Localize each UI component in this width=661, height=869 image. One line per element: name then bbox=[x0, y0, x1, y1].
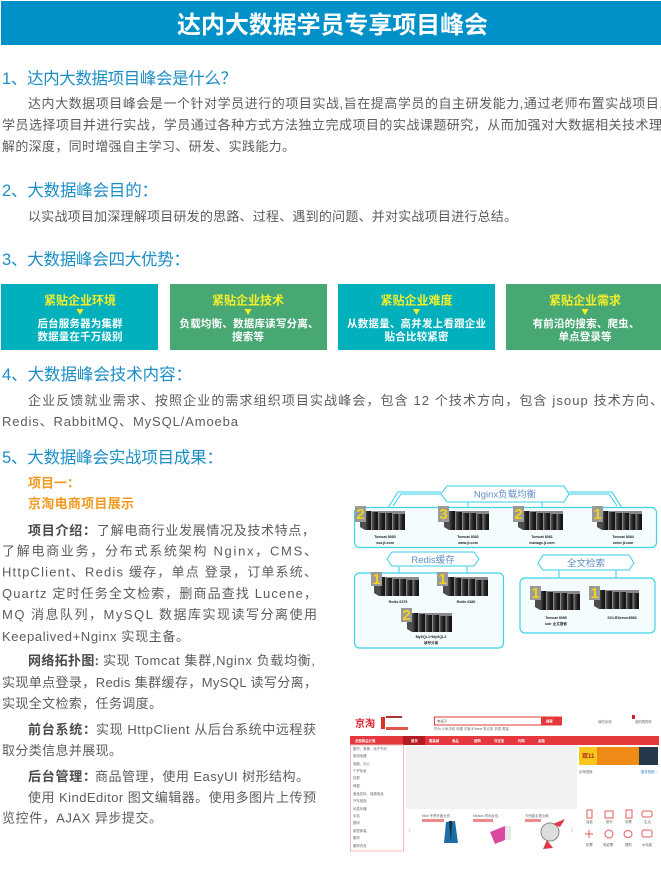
Nginx cluster box: 2 bbox=[514, 506, 523, 523]
card: enterprise demand: 有前沿的搜索、爬虫、 bbox=[532, 317, 640, 330]
product items: › bbox=[570, 825, 573, 836]
Nginx cluster box: Tomcat 8083 bbox=[374, 535, 396, 539]
service icon captions bbox=[586, 819, 653, 847]
category sidebar: 手机 bbox=[353, 813, 360, 818]
Nginx cluster box: 3 bbox=[439, 506, 448, 523]
section 4 body: 企业反馈就业需求、按照企业的需求组织项目实战峰会，包含 12 个技术方向，包含 jsoup 技术方向、 bbox=[28, 393, 661, 408]
section 4 heading: 4、大数据峰会技术内容： bbox=[2, 365, 192, 384]
full-text search cluster box: 1 bbox=[531, 585, 540, 602]
Redis label: Redis缓存 bbox=[411, 554, 455, 566]
section 1 body bbox=[2, 96, 661, 154]
news heading: 京淘快报 bbox=[579, 769, 593, 774]
site logo: 京淘 bbox=[355, 717, 375, 730]
card: enterprise technology: 紧贴企业技术 bbox=[212, 292, 284, 308]
full-text search label bbox=[538, 555, 634, 570]
product items bbox=[408, 813, 573, 849]
section 1 body: 解的深度，同时增强自主学习、研发、实践能力。 bbox=[2, 139, 295, 154]
search box: 电视子 bbox=[437, 718, 448, 724]
full-text search cluster box: solr 全文搜索 bbox=[545, 621, 567, 626]
product items: 卡西欧手表女款 bbox=[525, 813, 549, 818]
network topology text: 实现 Tomcat 集群,Nginx 负载均衡, bbox=[103, 653, 315, 668]
card: enterprise environment: 后台服务器为集群 bbox=[38, 317, 123, 330]
user links: 我的购物车 bbox=[635, 719, 653, 724]
Redis cluster box: 1 bbox=[438, 571, 447, 588]
Nginx cluster box: order.jt.com bbox=[613, 541, 633, 545]
front-end system text: 取分类信息并展现。 bbox=[2, 743, 122, 758]
service icon captions: 话费 bbox=[586, 819, 593, 824]
project one label: 项目一： bbox=[28, 476, 80, 490]
user links: 我的京淘 bbox=[598, 719, 612, 724]
full-text search label: 全文检索 bbox=[567, 558, 605, 570]
front-end system text: 前台系统： bbox=[28, 722, 96, 737]
Redis cluster box: 读写分离 bbox=[424, 640, 439, 645]
search box bbox=[434, 717, 562, 731]
category sidebar: 图书、音像、电子书刊 bbox=[353, 746, 388, 751]
Nginx cluster box: 1 bbox=[593, 506, 602, 523]
e-commerce website screenshot bbox=[350, 715, 659, 851]
full-text search cluster box bbox=[520, 578, 655, 633]
full-text search cluster box: SOLRServer8983 bbox=[607, 616, 637, 620]
product items: Nike 冬季外套大衣 bbox=[422, 813, 451, 818]
front-end system text: 实现 HttpClient 从后台系统中远程获 bbox=[96, 722, 316, 737]
Redis cluster box: MySQL1+MySQL2 bbox=[416, 635, 446, 639]
search box: 华为 小米手机 电视 平板 iPhone 笔记本 手表 男装 bbox=[434, 726, 509, 731]
Nginx cluster box: www.jt.com bbox=[457, 541, 478, 545]
service icon captions: 机票 bbox=[586, 842, 593, 847]
navigation bar: 金融 bbox=[538, 738, 545, 743]
section 4 body bbox=[2, 393, 661, 429]
promo banner bbox=[579, 747, 658, 765]
project introduction: 项目介绍： bbox=[28, 523, 96, 538]
Redis cluster box: Redis 6379 bbox=[389, 600, 407, 604]
card: enterprise difficulty: 从数据量、高并发上看跟企业 bbox=[347, 317, 486, 330]
section 3 heading: 3、大数据峰会四大优势： bbox=[2, 250, 190, 269]
project introduction: Keepalived+Nginx 实现主备。 bbox=[2, 629, 189, 644]
category sidebar bbox=[350, 745, 404, 851]
category sidebar: 家居家装 bbox=[353, 828, 367, 833]
network topology text: 实现单点登录，Redis 集群缓存，MySQL 读写分离， bbox=[2, 675, 317, 690]
navigation bar bbox=[350, 736, 659, 745]
project one label bbox=[28, 476, 134, 511]
title: 达内大数据学员专享项目峰会 bbox=[177, 12, 488, 39]
card: enterprise demand bbox=[506, 284, 661, 350]
card: enterprise demand: 单点登录等 bbox=[558, 330, 612, 343]
navigation bar: 服装城 bbox=[429, 738, 440, 743]
category sidebar: 电脑、办公 bbox=[353, 761, 371, 766]
section 4 body: Redis、RabbitMQ、MySQL/Amoeba bbox=[2, 414, 239, 429]
Nginx cluster box: sso.jt.com bbox=[376, 541, 394, 545]
project introduction: Quartz 定时任务全文检索，删商品查找 Lucene， bbox=[2, 586, 317, 601]
category sidebar: 汽车用品 bbox=[353, 798, 367, 803]
network topology text bbox=[2, 653, 317, 711]
front-end system text bbox=[2, 722, 316, 758]
back-end management text: 使用 KindEditor 图文编辑器。使用多图片上传预 bbox=[28, 790, 316, 805]
navigation bar: 团购 bbox=[474, 738, 481, 743]
category sidebar: 服饰 bbox=[353, 835, 360, 840]
category sidebar: 玩具乐器 bbox=[353, 806, 367, 811]
Redis cluster box: Redis 6380 bbox=[457, 600, 475, 604]
project introduction: 了解电商业务，分布式系统架构 Nginx，CMS、 bbox=[2, 544, 317, 558]
promo banner: 双11 bbox=[582, 753, 595, 760]
Nginx cluster box: 2 bbox=[356, 506, 365, 523]
full-text search cluster box: 1 bbox=[590, 585, 599, 602]
Redis cluster box: 1 bbox=[372, 571, 381, 588]
navigation bar: 闪购 bbox=[518, 738, 525, 743]
news heading bbox=[579, 769, 657, 774]
category sidebar: 家用电器 bbox=[353, 753, 367, 758]
Nginx cluster box: Tomcat 8082 bbox=[457, 535, 479, 539]
Nginx label: Nginx负载均衡 bbox=[474, 488, 537, 500]
Nginx label bbox=[441, 486, 569, 502]
Redis label bbox=[387, 552, 479, 566]
category sidebar: 服饰内衣 bbox=[353, 843, 367, 848]
back-end management text bbox=[2, 769, 316, 826]
full-text search cluster box: Tomcat 8085 bbox=[545, 616, 567, 620]
category sidebar: 数码 bbox=[353, 820, 360, 825]
section 2 heading: 2、大数据峰会目的： bbox=[2, 181, 158, 200]
service icons bbox=[585, 810, 652, 838]
navigation bar: 食品 bbox=[452, 738, 459, 743]
news heading: 更多快报 › bbox=[641, 769, 657, 774]
card: enterprise environment bbox=[1, 284, 158, 350]
navigation bar: 夺宝岛 bbox=[494, 738, 505, 743]
project introduction: 了解电商行业发展情况及技术特点， bbox=[97, 523, 315, 538]
network topology text: 网络拓扑图: bbox=[28, 653, 99, 668]
card: enterprise technology: 搜索等 bbox=[232, 330, 264, 343]
card: enterprise difficulty: 贴合比较紧密 bbox=[384, 330, 449, 343]
project introduction: HttpClient、Redis 缓存，单点 登录，订单系统、 bbox=[2, 564, 317, 580]
back-end management text: 商品管理，使用 EasyUI 树形结构。 bbox=[95, 769, 309, 784]
card: enterprise demand: 紧贴企业需求 bbox=[549, 292, 621, 308]
product items: ‹ bbox=[408, 825, 411, 836]
Nginx cluster box: manage.jt.com bbox=[529, 541, 555, 545]
section 1 body: 学员选择项目并进行实战，学员通过各种方式方法独立完成项目的实战课题研究，从而加强对大数据相关技术理 bbox=[2, 118, 661, 132]
service icon captions: 水电费 bbox=[642, 842, 653, 847]
service icon captions: 电影票 bbox=[603, 842, 614, 847]
card: enterprise environment: 数据量在千万级别 bbox=[38, 330, 122, 343]
Nginx cluster box: Tomcat 8084 bbox=[612, 535, 634, 539]
service icon captions: 理财 bbox=[625, 842, 632, 847]
connector lines bbox=[388, 492, 622, 612]
card: enterprise technology: 负载均衡、数据库读写分离、 bbox=[180, 317, 318, 330]
service icon captions: 旅行 bbox=[606, 819, 613, 824]
project introduction bbox=[2, 523, 317, 644]
Redis cluster box: 2 bbox=[402, 607, 411, 624]
product items: Midsun 时尚女包 bbox=[473, 813, 499, 818]
service icon captions: 生活 bbox=[644, 819, 651, 824]
section 2 body: 以实战项目加深理解项目研发的思路、过程、遇到的问题、并对实战项目进行总结。 bbox=[28, 209, 517, 224]
site logo bbox=[355, 716, 408, 730]
category sidebar: 个护化妆 bbox=[353, 768, 367, 773]
project one label: 京淘电商项目展示 bbox=[28, 496, 134, 511]
category sidebar: 母婴 bbox=[353, 783, 360, 788]
section 1 heading: 1、达内大数据项目峰会是什么？ bbox=[2, 69, 237, 88]
network topology diagram bbox=[354, 486, 656, 648]
service icon captions: 彩票 bbox=[625, 819, 632, 824]
section 5 heading: 5、大数据峰会实战项目成果： bbox=[2, 448, 223, 467]
card: enterprise difficulty: 紧贴企业难度 bbox=[380, 292, 452, 308]
category sidebar: 食品饮料、保健食品 bbox=[353, 791, 384, 796]
advantage cards bbox=[1, 284, 661, 350]
user links bbox=[598, 715, 653, 724]
card: enterprise technology bbox=[170, 284, 327, 350]
header banner bbox=[1, 1, 661, 45]
carousel placeholder bbox=[406, 746, 577, 809]
back-end management text: 后台管理： bbox=[28, 769, 96, 784]
card: enterprise environment: 紧贴企业环境 bbox=[44, 292, 116, 308]
section 1 body: 达内大数据项目峰会是一个针对学员进行的项目实战,旨在提高学员的自主研发能力,通过老师布置实战项目, bbox=[28, 96, 661, 111]
category sidebar: 钟表 bbox=[353, 775, 360, 780]
navigation bar: 全部商品分类 bbox=[355, 738, 376, 743]
back-end management text: 览控件，AJAX 异步提交。 bbox=[2, 810, 162, 826]
Nginx cluster box: Tomcat 8081 bbox=[531, 535, 553, 539]
card: enterprise difficulty bbox=[338, 284, 495, 350]
Redis cluster box bbox=[354, 571, 504, 648]
Nginx cluster box bbox=[354, 506, 656, 548]
navigation bar: 首页 bbox=[411, 738, 418, 743]
network topology text: 实现全文检索，任务调度。 bbox=[2, 696, 162, 711]
search box: 搜索 bbox=[546, 718, 553, 724]
project introduction: MQ 消息队列，MySQL 数据库实现读写分离使用 bbox=[2, 607, 317, 622]
